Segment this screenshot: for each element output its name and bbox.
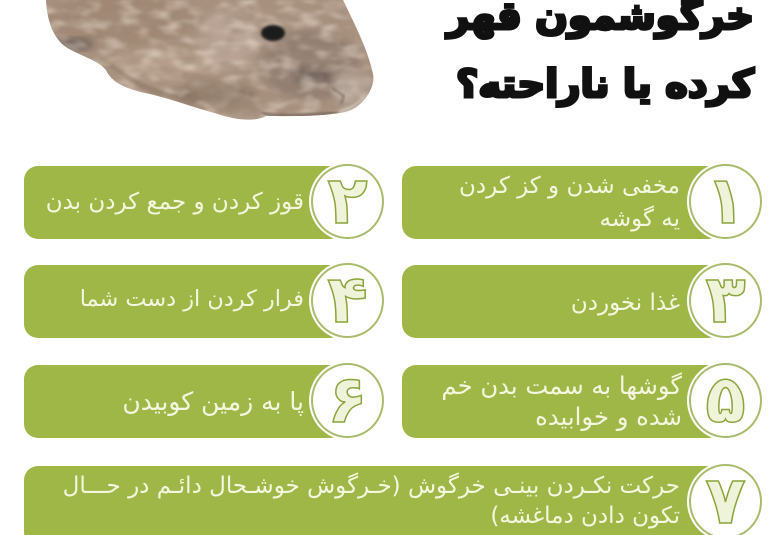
bar: [24, 365, 344, 438]
bar: [24, 466, 722, 535]
item 5: [402, 361, 762, 438]
number badge: ۵: [705, 361, 746, 438]
text: قوز کردن و جمع کردن بدن: [46, 189, 304, 215]
item 7: [24, 464, 762, 535]
title line 2: کرده یا ناراحته؟: [456, 62, 754, 107]
number badge: ۱: [705, 162, 746, 239]
number badge: [311, 263, 384, 338]
text: شده و خوابیده: [535, 402, 682, 431]
text: یه گوشه: [600, 206, 680, 232]
photo: rabbit lying down: [46, 0, 374, 120]
text: پا به زمین کوبیدن: [122, 387, 304, 416]
title: [444, 0, 756, 108]
text: [459, 173, 680, 232]
text: مخفی شدن و کز کردن: [459, 173, 680, 199]
bar: [24, 166, 344, 239]
number badge: [311, 164, 384, 239]
text: تکون دادن دماغشه): [490, 503, 680, 529]
bar: [24, 265, 344, 338]
number badge: [311, 363, 384, 438]
bar: [402, 265, 722, 338]
number badge: ۶: [327, 361, 368, 438]
number badge: [689, 263, 762, 338]
number badge: [689, 363, 762, 438]
text: [63, 472, 680, 529]
item 3: [402, 261, 762, 338]
number badge: ۲: [327, 162, 368, 239]
text: گوشها به سمت بدن خم: [441, 371, 682, 400]
text: فرار کردن از دست شما: [80, 286, 304, 312]
item 1: [402, 162, 762, 239]
item 6: [24, 361, 384, 438]
text: [441, 371, 682, 431]
number badge: ۴: [327, 261, 368, 338]
number badge: [689, 164, 762, 239]
number badge: [689, 464, 762, 535]
bar: [402, 166, 722, 239]
number badge: ۳: [705, 261, 746, 338]
text: حرکت نکـردن بینـی خرگوش (خـرگوش خوشـحال دائـم در حـــال: [63, 473, 680, 499]
item 4: [24, 261, 384, 338]
text: غذا نخوردن: [571, 290, 680, 316]
bar: [402, 365, 722, 438]
item 2: [24, 162, 384, 239]
